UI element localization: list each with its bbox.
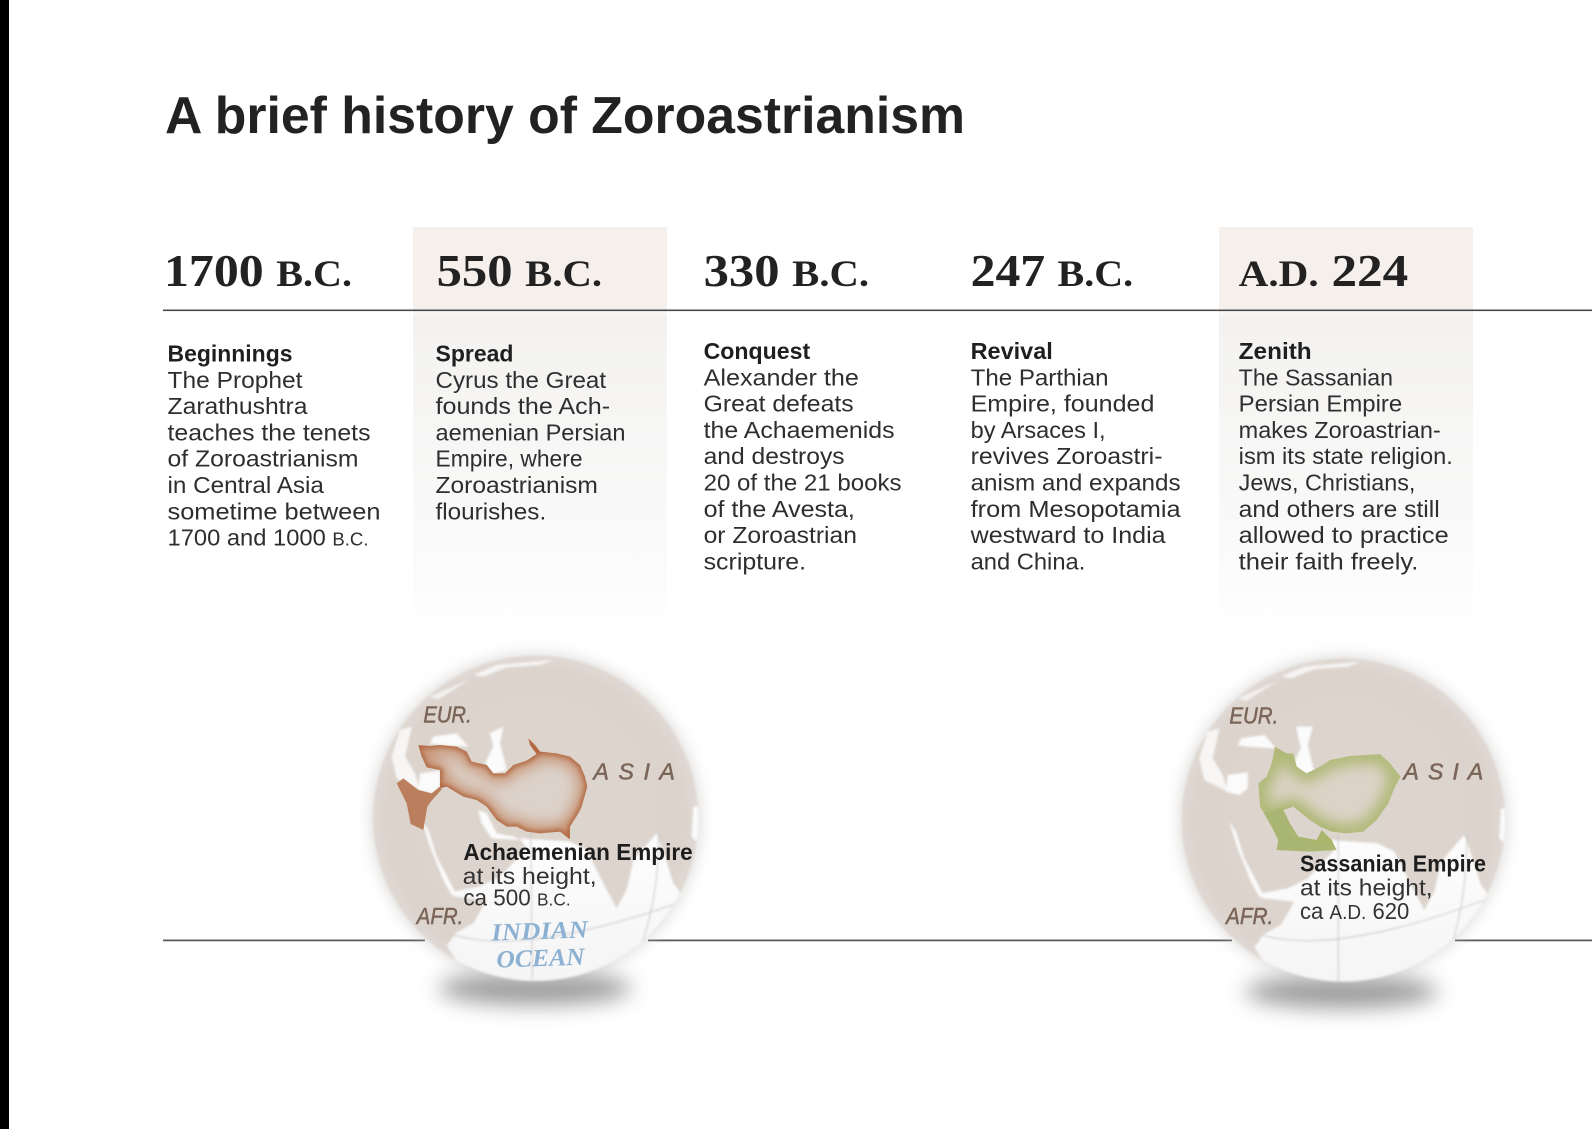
description: and China. xyxy=(971,548,1085,574)
description: of Zoroastrianism xyxy=(168,446,358,472)
description: The Prophet xyxy=(168,367,303,393)
description: anism and expands xyxy=(971,470,1181,496)
map caption: ca A.D. 620 xyxy=(1300,898,1409,924)
globe halo xyxy=(1180,657,1506,983)
map caption: at its height, xyxy=(463,863,597,889)
column: A.D. 224 xyxy=(1239,245,1453,574)
description xyxy=(970,338,1181,574)
description: Cyrus the Great xyxy=(436,367,607,393)
continent labels: ASIA xyxy=(591,758,675,784)
highlight band: A.D. 224 column xyxy=(1219,227,1473,640)
column: 1700 B.C. xyxy=(164,245,380,551)
column: 550 B.C. xyxy=(436,245,626,524)
title: A brief history of Zoroastrianism xyxy=(165,87,965,145)
description: flourishes. xyxy=(436,498,546,524)
description: The Sassanian xyxy=(1239,364,1393,390)
description: Zoroastrianism xyxy=(436,472,598,498)
date: 1700 B.C. xyxy=(164,245,352,296)
description: and destroys xyxy=(704,443,845,469)
empire territory xyxy=(396,738,588,840)
description xyxy=(1239,338,1453,574)
description: makes Zoroastrian- xyxy=(1239,417,1441,443)
ocean label: INDIAN xyxy=(490,916,590,947)
description: founds the Ach- xyxy=(436,393,610,419)
column: 330 B.C. xyxy=(704,245,902,574)
description: from Mesopotamia xyxy=(971,496,1181,522)
globe shadow xyxy=(438,972,632,1005)
continent labels: AFR. xyxy=(1224,903,1273,929)
description: 1700 and 1000 B.C. xyxy=(168,525,368,551)
description: allowed to practice xyxy=(1239,522,1449,548)
date: 247 B.C. xyxy=(971,245,1133,296)
continent labels: ASIA xyxy=(1401,758,1483,784)
description: Empire, where xyxy=(436,446,582,472)
globe halo xyxy=(372,654,700,982)
description: by Arsaces I, xyxy=(971,417,1106,443)
map caption xyxy=(463,839,693,911)
bottom rule xyxy=(163,940,1592,941)
description xyxy=(704,338,902,574)
continent labels: EUR. xyxy=(1229,702,1278,728)
description: westward to India xyxy=(970,522,1166,548)
globe body xyxy=(373,656,707,997)
description: Empire, founded xyxy=(971,391,1154,417)
description: aemenian Persian xyxy=(436,419,626,445)
description: Jews, Christians, xyxy=(1239,470,1415,496)
description xyxy=(168,340,380,551)
globe map: Sassanian Empire xyxy=(1180,657,1514,1008)
description: sometime between xyxy=(168,498,380,524)
description: the Achaemenids xyxy=(704,417,895,443)
continent labels: EUR. xyxy=(423,702,472,728)
map caption: Sassanian Empire xyxy=(1300,851,1486,877)
description: teaches the tenets xyxy=(168,419,370,445)
description: 20 of the 21 books xyxy=(704,470,902,496)
globe shadow xyxy=(1245,975,1438,1008)
left black edge bar xyxy=(0,0,9,1129)
description: in Central Asia xyxy=(168,472,324,498)
description: Alexander the xyxy=(704,364,859,390)
empire territory xyxy=(1258,746,1400,852)
map caption: ca 500 B.C. xyxy=(463,885,571,911)
continent labels xyxy=(1224,702,1483,929)
description: Great defeats xyxy=(704,391,854,417)
description: Spread xyxy=(436,340,514,366)
description: scripture. xyxy=(704,548,806,574)
description: Revival xyxy=(971,338,1053,364)
date: 550 B.C. xyxy=(437,245,602,296)
description: or Zoroastrian xyxy=(704,522,857,548)
timeline header rule xyxy=(163,310,1592,311)
column: 247 B.C. xyxy=(970,245,1181,574)
description xyxy=(436,340,626,524)
description: of the Avesta, xyxy=(704,496,855,522)
description: Zenith xyxy=(1239,338,1312,364)
globe body xyxy=(1182,658,1514,998)
description: Beginnings xyxy=(168,340,292,366)
map caption xyxy=(1300,851,1486,924)
description: Conquest xyxy=(704,338,811,364)
description: ism its state religion. xyxy=(1239,443,1453,469)
description: their faith freely. xyxy=(1239,548,1418,574)
description: Zarathushtra xyxy=(168,393,308,419)
description: The Parthian xyxy=(971,364,1109,390)
globe map: Achaemenian Empire xyxy=(372,654,707,1005)
description: revives Zoroastri- xyxy=(971,443,1162,469)
map caption: at its height, xyxy=(1300,875,1433,901)
ocean label xyxy=(490,916,590,974)
ocean label: OCEAN xyxy=(496,944,586,974)
description: Persian Empire xyxy=(1239,391,1402,417)
description: and others are still xyxy=(1239,496,1440,522)
date: A.D. 224 xyxy=(1239,245,1408,296)
continent labels xyxy=(415,702,675,929)
continent labels: AFR. xyxy=(415,903,463,929)
date: 330 B.C. xyxy=(704,245,869,296)
highlight band: 550 B.C. column xyxy=(413,227,667,640)
map caption: Achaemenian Empire xyxy=(463,839,693,865)
